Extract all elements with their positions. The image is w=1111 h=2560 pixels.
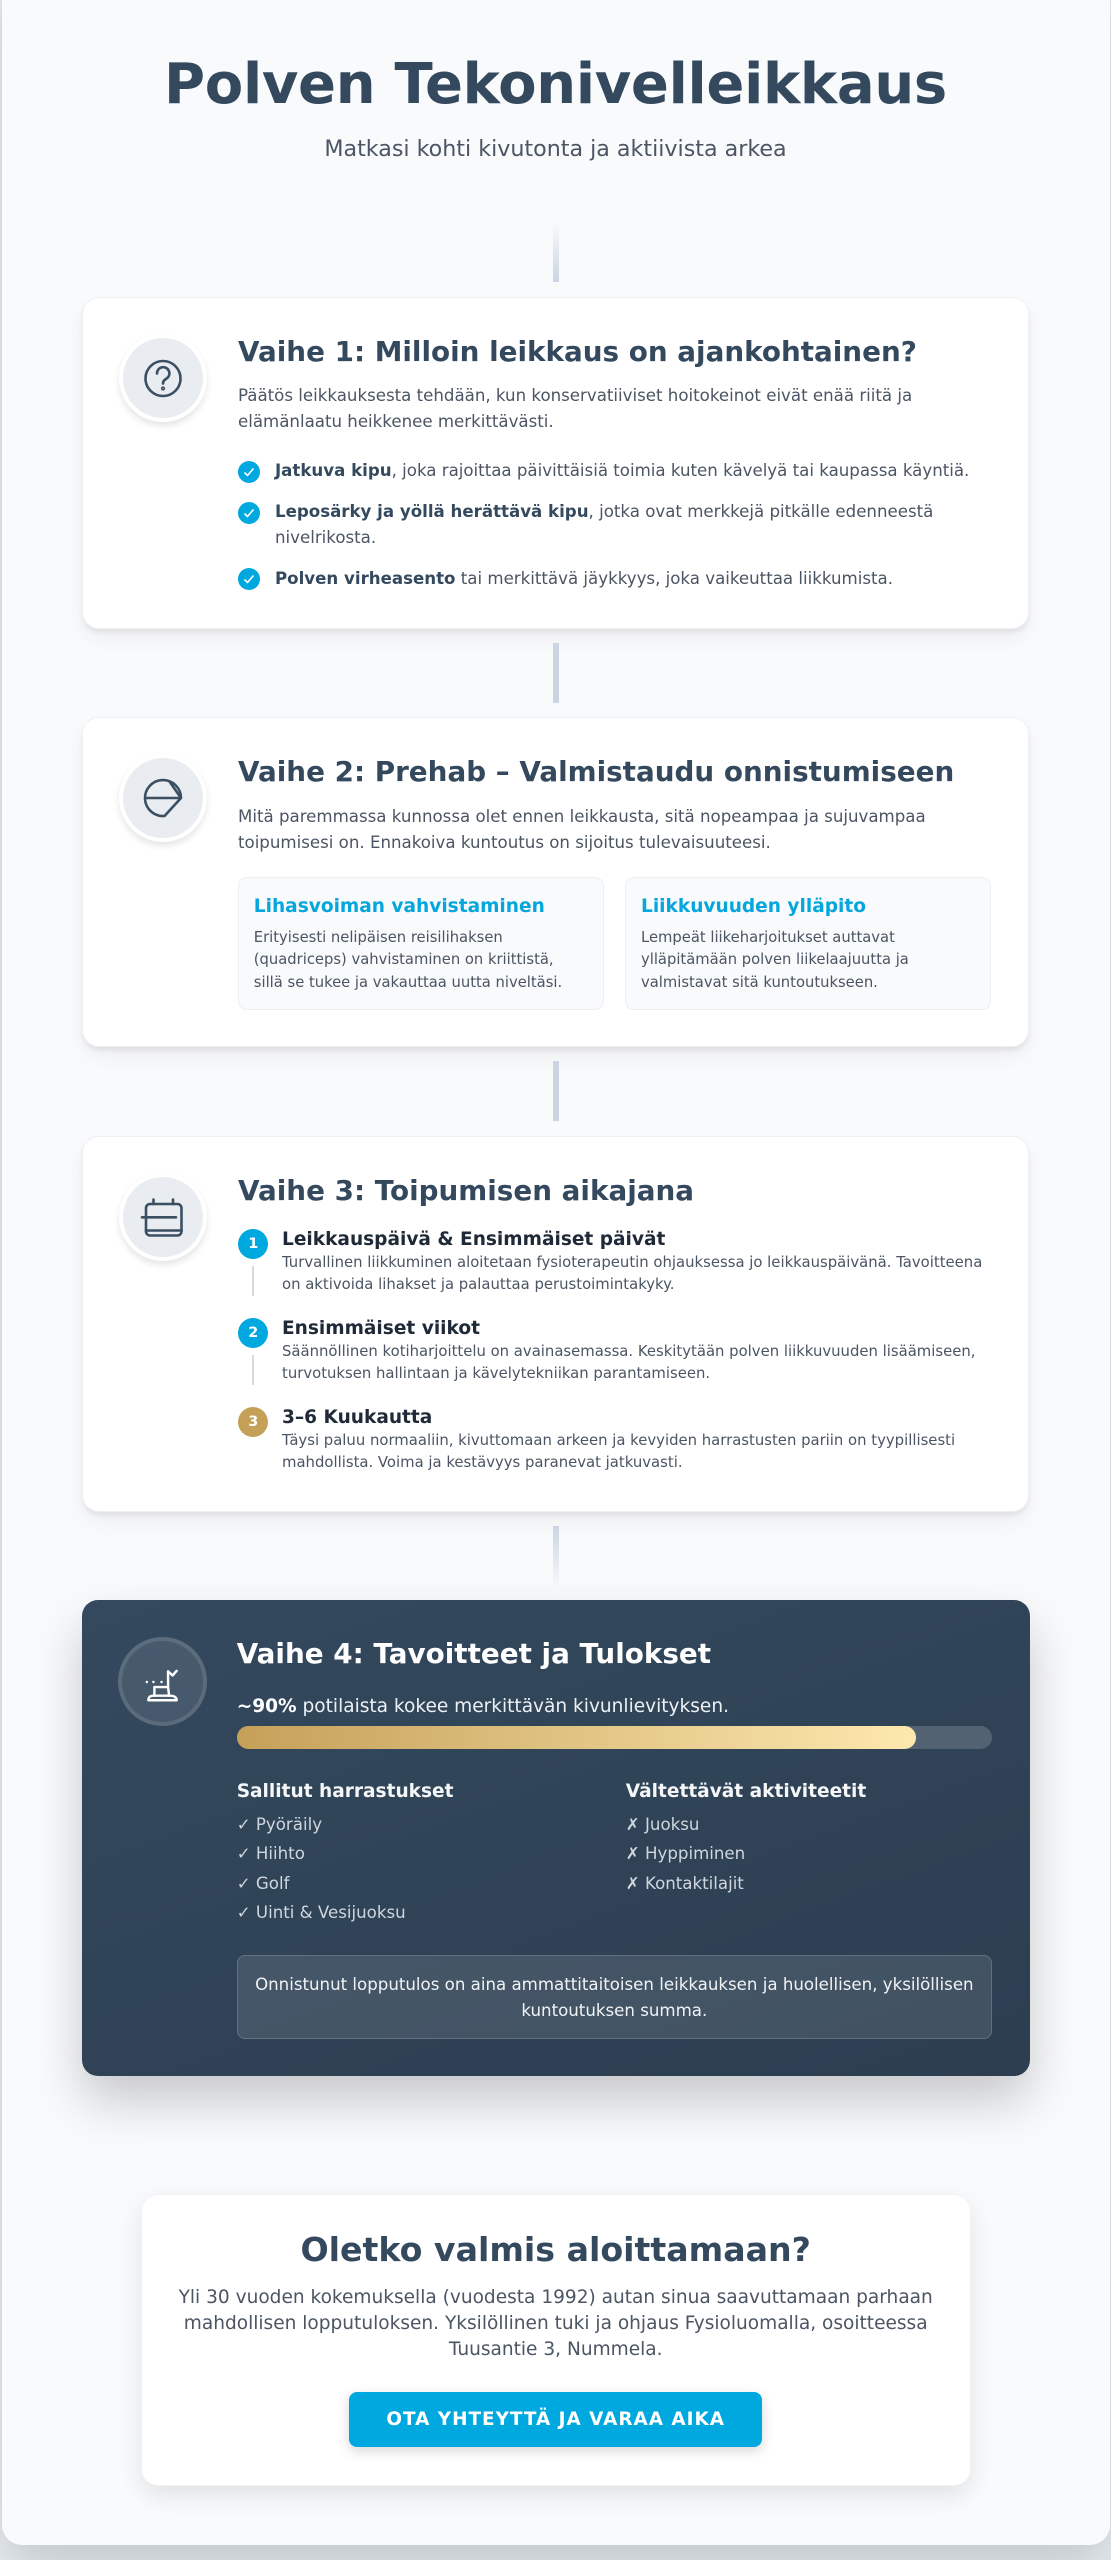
progress fill [237,1726,916,1749]
button: OTA YHTEYTTÄ JA VARAA AIKA [386,2409,725,2430]
badge 2: 2 [248,1325,258,1341]
list: activities to avoid [626,1781,866,1893]
icon: calendar [123,1177,203,1257]
tip text [641,929,909,991]
text: call to action: Tuusantie 3, Nummela. [449,2339,663,2360]
timeline step 1 [238,1229,982,1296]
list items: ✓ Golf [237,1874,289,1893]
step text [282,1431,955,1471]
connector: step 1 to step 2 [552,643,558,703]
tip text: Erityisesti nelipäisen reisilihaksen [254,929,503,946]
tip card: muscle strength [239,878,603,1008]
tip text: ylläpitämään polven liikelaajuutta ja [641,951,909,968]
list items [626,1815,745,1893]
list heading: Sallitut harrastukset [237,1781,453,1802]
tip text [254,929,562,991]
heading: step 3: Vaihe 3: Toipumisen aikajana [238,1174,694,1207]
step text: on aktivoida lihakset ja palauttaa perustoimintakyky. [282,1275,674,1293]
icon: check 2 [238,502,260,524]
tip text: Lempeät liikeharjoitukset auttavat [641,929,895,946]
step text [282,1253,982,1293]
connector: step 3 to step 4 [552,1526,558,1590]
tip text: valmistavat sitä kuntoutukseen. [641,974,878,991]
heading: step 4: Vaihe 4: Tavoitteet ja Tulokset [237,1637,711,1670]
heading: call to action: Oletko valmis aloittamaan? [300,2230,811,2269]
progress bar: 90% [237,1726,992,1749]
text: call to action [178,2287,933,2360]
step text: Täysi paluu normaaliin, kivuttomaan arkeen ja kevyiden harrastusten pariin on tyypillisesti [282,1431,955,1449]
text: step 1 intro [238,386,912,431]
callout: Onnistunut lopputulos on aina ammattitaitoisen leikkauksen ja huolellisen, yksilöllisen [255,1975,974,1994]
panel: call to action [142,2195,970,2485]
stat text: ~90% potilaista kokee merkittävän kivunlievityksen. [237,1696,729,1716]
connector: step 2 to step 3 [552,1061,558,1121]
icon: check 1 [238,461,260,483]
timeline step 3 [238,1407,955,1471]
text: call to action: Yli 30 vuoden kokemuksella (vuodesta 1992) autan sinua saavuttamaan parhaan [179,2287,933,2308]
list items: ✓ Pyöräily [237,1815,322,1834]
text: step 1 intro: Päätös leikkauksesta tehdään, kun konservatiiviset hoitokeinot eivät enää riitä ja [238,386,912,405]
panel: step 3 [83,1137,1028,1511]
heading: step 1: Vaihe 1: Milloin leikkaus on ajankohtainen? [238,334,917,368]
step text: turvotuksen hallintaan ja kävelytekniikan parantamiseen. [282,1364,710,1382]
tip text: (quadriceps) vahvistaminen on kriittistä, [254,951,554,968]
list item 2: nivelrikosta. [275,528,376,547]
step title: Ensimmäiset viikot [282,1318,480,1339]
title: Polven Tekonivelleikkaus [164,52,947,117]
text: step 1 intro: elämänlaatu heikkenee merkittävästi. [238,412,554,431]
step title: Leikkauspäivä & Ensimmäiset päivät [282,1229,665,1250]
list items: ✗ Juoksu [626,1815,699,1834]
list item 2 [275,502,933,547]
step text: Turvallinen liikkuminen aloitetaan fysioterapeutin ohjauksessa jo leikkauspäivänä. Tavoitteena [282,1253,982,1271]
list items: ✗ Hyppiminen [626,1844,745,1863]
callout: kuntoutuksen summa. [521,2001,707,2020]
list items: ✗ Kontaktilajit [626,1874,744,1893]
tip heading: Liikkuvuuden ylläpito [641,896,866,917]
panel: step 2 [83,718,1028,1046]
badge 3 [238,1407,268,1437]
connector: intro to step 1 [552,222,558,282]
list items [237,1815,406,1922]
badge 3: 3 [248,1414,258,1430]
button [349,2392,762,2447]
tip heading: Lihasvoiman vahvistaminen [254,896,545,917]
icon: question mark [123,338,203,418]
list item 3: Polven virheasento tai merkittävä jäykkyys, joka vaikeuttaa liikkumista. [275,569,893,588]
badge 1 [238,1229,268,1259]
badge 1: 1 [248,1236,258,1252]
text: step 2 intro [238,806,926,852]
text: step 2 intro: Mitä paremmassa kunnossa olet ennen leikkausta, sitä nopeampaa ja sujuvampaa [238,806,926,826]
list: allowed activities [237,1781,454,1922]
text: step 2 intro: toipumisesi on. Ennakoiva kuntoutus on sijoitus tulevaisuuteesi. [238,832,771,852]
tip card: mobility [626,878,990,1008]
list item 1: Jatkuva kipu, joka rajoittaa päivittäisiä toimia kuten kävelyä tai kaupassa käyntiä. [275,461,969,480]
icon: knee joint [123,758,203,838]
heading: step 2: Vaihe 2: Prehab – Valmistaudu onnistumiseen [238,755,954,788]
icon: golf flag [122,1641,203,1722]
text: call to action: mahdollisen lopputuloksen. Yksilöllinen tuki ja ohjaus Fysioluomalla, osoitteessa [184,2313,928,2334]
subtitle: Matkasi kohti kivutonta ja aktiivista arkea [324,136,787,162]
list items: ✓ Uinti & Vesijuoksu [237,1903,406,1922]
panel: step 1 [83,298,1028,628]
badge 2 [238,1318,268,1348]
callout [237,1955,992,2039]
step text: mahdollista. Voima ja kestävyys paranevat jatkuvasti. [282,1453,683,1471]
timeline step 2 [238,1318,976,1385]
list heading: Vältettävät aktiviteetit [626,1781,866,1802]
list item 2: Leposärky ja yöllä herättävä kipu, jotka ovat merkkejä pitkälle edenneestä [275,502,933,521]
step text [282,1342,976,1382]
list items: ✓ Hiihto [237,1844,305,1863]
panel: step 4 [82,1600,1030,2076]
tip text: sillä se tukee ja vakauttaa uutta niveltäsi. [254,974,562,991]
step title: 3–6 Kuukautta [282,1407,432,1428]
step text: Säännöllinen kotiharjoittelu on avainasemassa. Keskitytään polven liikkuvuuden lisäämiseen, [282,1342,976,1360]
icon: check 3 [238,568,260,590]
